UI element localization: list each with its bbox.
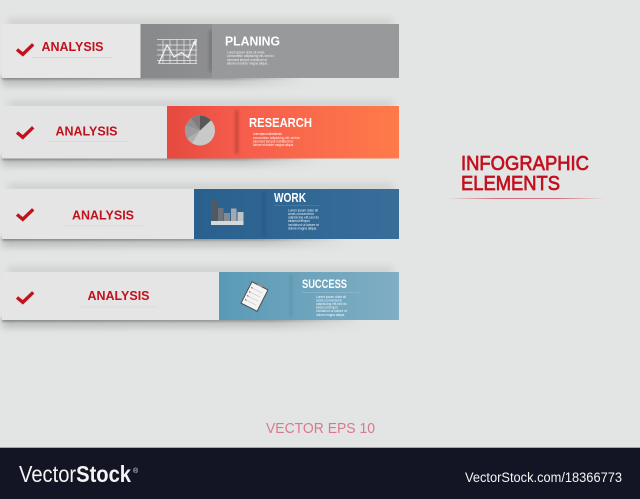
text block: consectetur adipisicing elit, sed do — [227, 54, 274, 58]
text block — [288, 208, 319, 230]
text block: adipisicing elit,sed do — [316, 302, 347, 306]
text block: labore et dolore magna aliqua. — [253, 143, 294, 147]
text block: consectetur adipisicing elit, sed do — [253, 136, 300, 140]
check mark — [17, 292, 33, 302]
logo: vectorstock: VectorStock — [19, 461, 131, 487]
icon: bar chart — [211, 200, 244, 225]
panel: research banner — [2, 102, 399, 165]
registered mark: ® — [133, 467, 139, 475]
text block: Lorem ipsum dolor sit — [288, 208, 318, 212]
heading: work: WORK — [274, 191, 306, 205]
icon: clipboard — [241, 279, 269, 311]
text block: Lorem ipsum dolor sit amet, — [227, 50, 265, 54]
heading: success: SUCCESS — [302, 279, 347, 291]
check mark — [17, 127, 33, 137]
text block: eiusmod tempor incididunt ut — [253, 139, 293, 143]
text block — [227, 50, 274, 65]
check mark — [17, 209, 33, 219]
caption: vector eps 10: VECTOR EPS 10 — [266, 420, 375, 437]
text block — [316, 295, 347, 317]
text block: adipisicing elit,sed do — [288, 216, 319, 220]
text block: incididunt ut labore et — [288, 223, 319, 227]
url: VectorStock.com/18366773 — [465, 470, 622, 485]
text block: labore et dolore magna aliqua. — [227, 61, 268, 65]
icon: pie chart — [185, 116, 215, 146]
heading: planing: PLANING — [225, 34, 280, 48]
panel: work banner — [2, 185, 399, 246]
text block: amet,consectetur — [288, 212, 315, 216]
title: infographic elements: INFOGRAPHIC — [461, 153, 589, 175]
text block: Lorem ipsum dolor sit — [316, 295, 346, 299]
text block: Lorem ipsum dolor sit amet, — [253, 132, 282, 136]
footer bar — [0, 448, 640, 499]
text block: eiusmod tempor — [316, 306, 339, 310]
analysis label: ANALYSIS — [88, 289, 150, 303]
text block: amet,consectetur — [316, 298, 343, 302]
icon: line chart — [157, 39, 197, 64]
text block: eiusmod tempor — [288, 219, 311, 223]
panel: success banner — [2, 268, 399, 327]
text block — [253, 132, 300, 147]
text block: eiusmod tempor incididunt ut — [227, 58, 267, 62]
text block: dolore magna aliqua. — [316, 313, 345, 317]
heading: research: RESEARCH — [249, 115, 312, 130]
title: infographic elements: ELEMENTS — [461, 173, 560, 195]
analysis label: ANALYSIS — [56, 124, 118, 138]
text block: incididunt ut labore et — [316, 309, 347, 313]
analysis label: ANALYSIS — [42, 40, 104, 54]
panel: planing banner — [2, 20, 399, 85]
text block: dolore magna aliqua. — [288, 226, 317, 230]
analysis label: ANALYSIS — [72, 208, 134, 222]
check mark — [17, 44, 33, 54]
title: infographic elements — [447, 153, 605, 199]
